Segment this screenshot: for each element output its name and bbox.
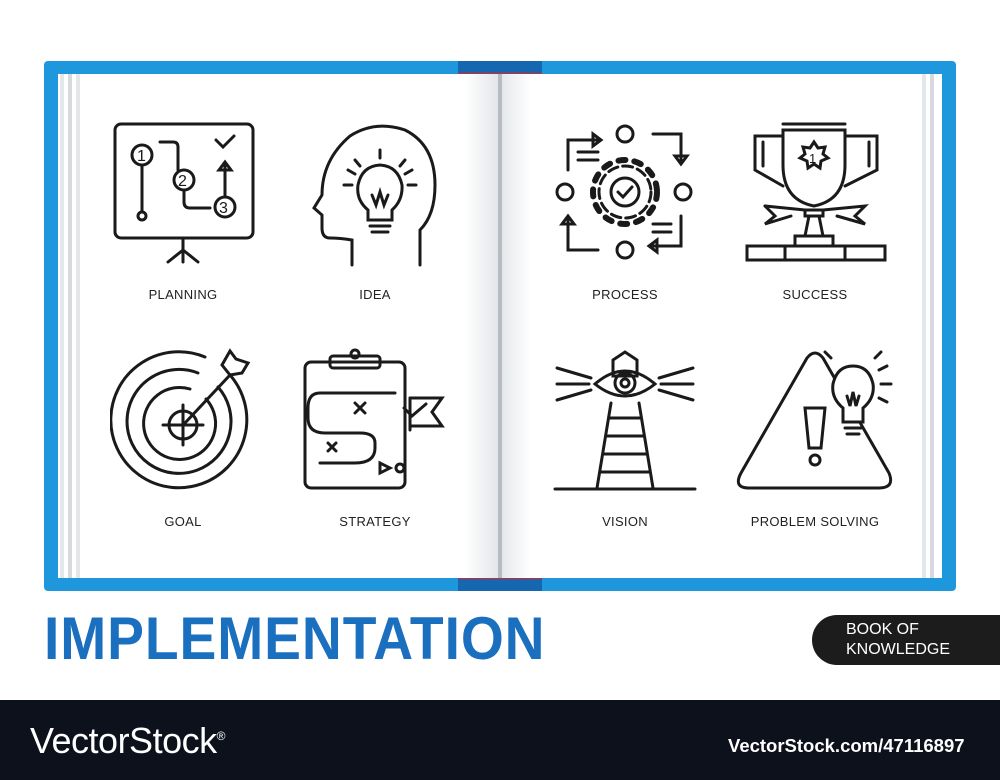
badge: book of knowledge: [812, 615, 1000, 665]
icon: success: [746, 122, 886, 262]
icon: process: [556, 124, 692, 260]
icon: vision: [554, 350, 696, 490]
icon: planning: [114, 122, 254, 264]
icon: idea: [312, 124, 436, 266]
icon: goal: [110, 348, 250, 490]
title: IMPLEMENTATION: [44, 605, 545, 672]
label: idea: IDEA: [359, 287, 391, 302]
label: process: PROCESS: [592, 287, 658, 302]
icon: success: 1: [809, 151, 816, 166]
icon: strategy: [304, 348, 445, 490]
label: goal: GOAL: [164, 514, 202, 529]
label: success: SUCCESS: [783, 287, 847, 302]
label: strategy: STRATEGY: [339, 514, 411, 529]
label: problem solving: PROBLEM SOLVING: [751, 514, 879, 529]
footer bar: [0, 700, 1000, 780]
label: vision: VISION: [602, 514, 648, 529]
icon: planning: 3: [219, 200, 228, 217]
icon: problem solving: [736, 350, 892, 490]
badge: book of knowledge: BOOK OF: [846, 621, 919, 638]
footer logo: VectorStock®: [30, 720, 225, 761]
icon: planning: 1: [137, 148, 146, 165]
badge: book of knowledge: KNOWLEDGE: [846, 641, 950, 658]
footer url: VectorStock.com/47116897: [728, 735, 965, 756]
icon: planning: 2: [178, 173, 187, 190]
label: planning: PLANNING: [149, 287, 217, 302]
